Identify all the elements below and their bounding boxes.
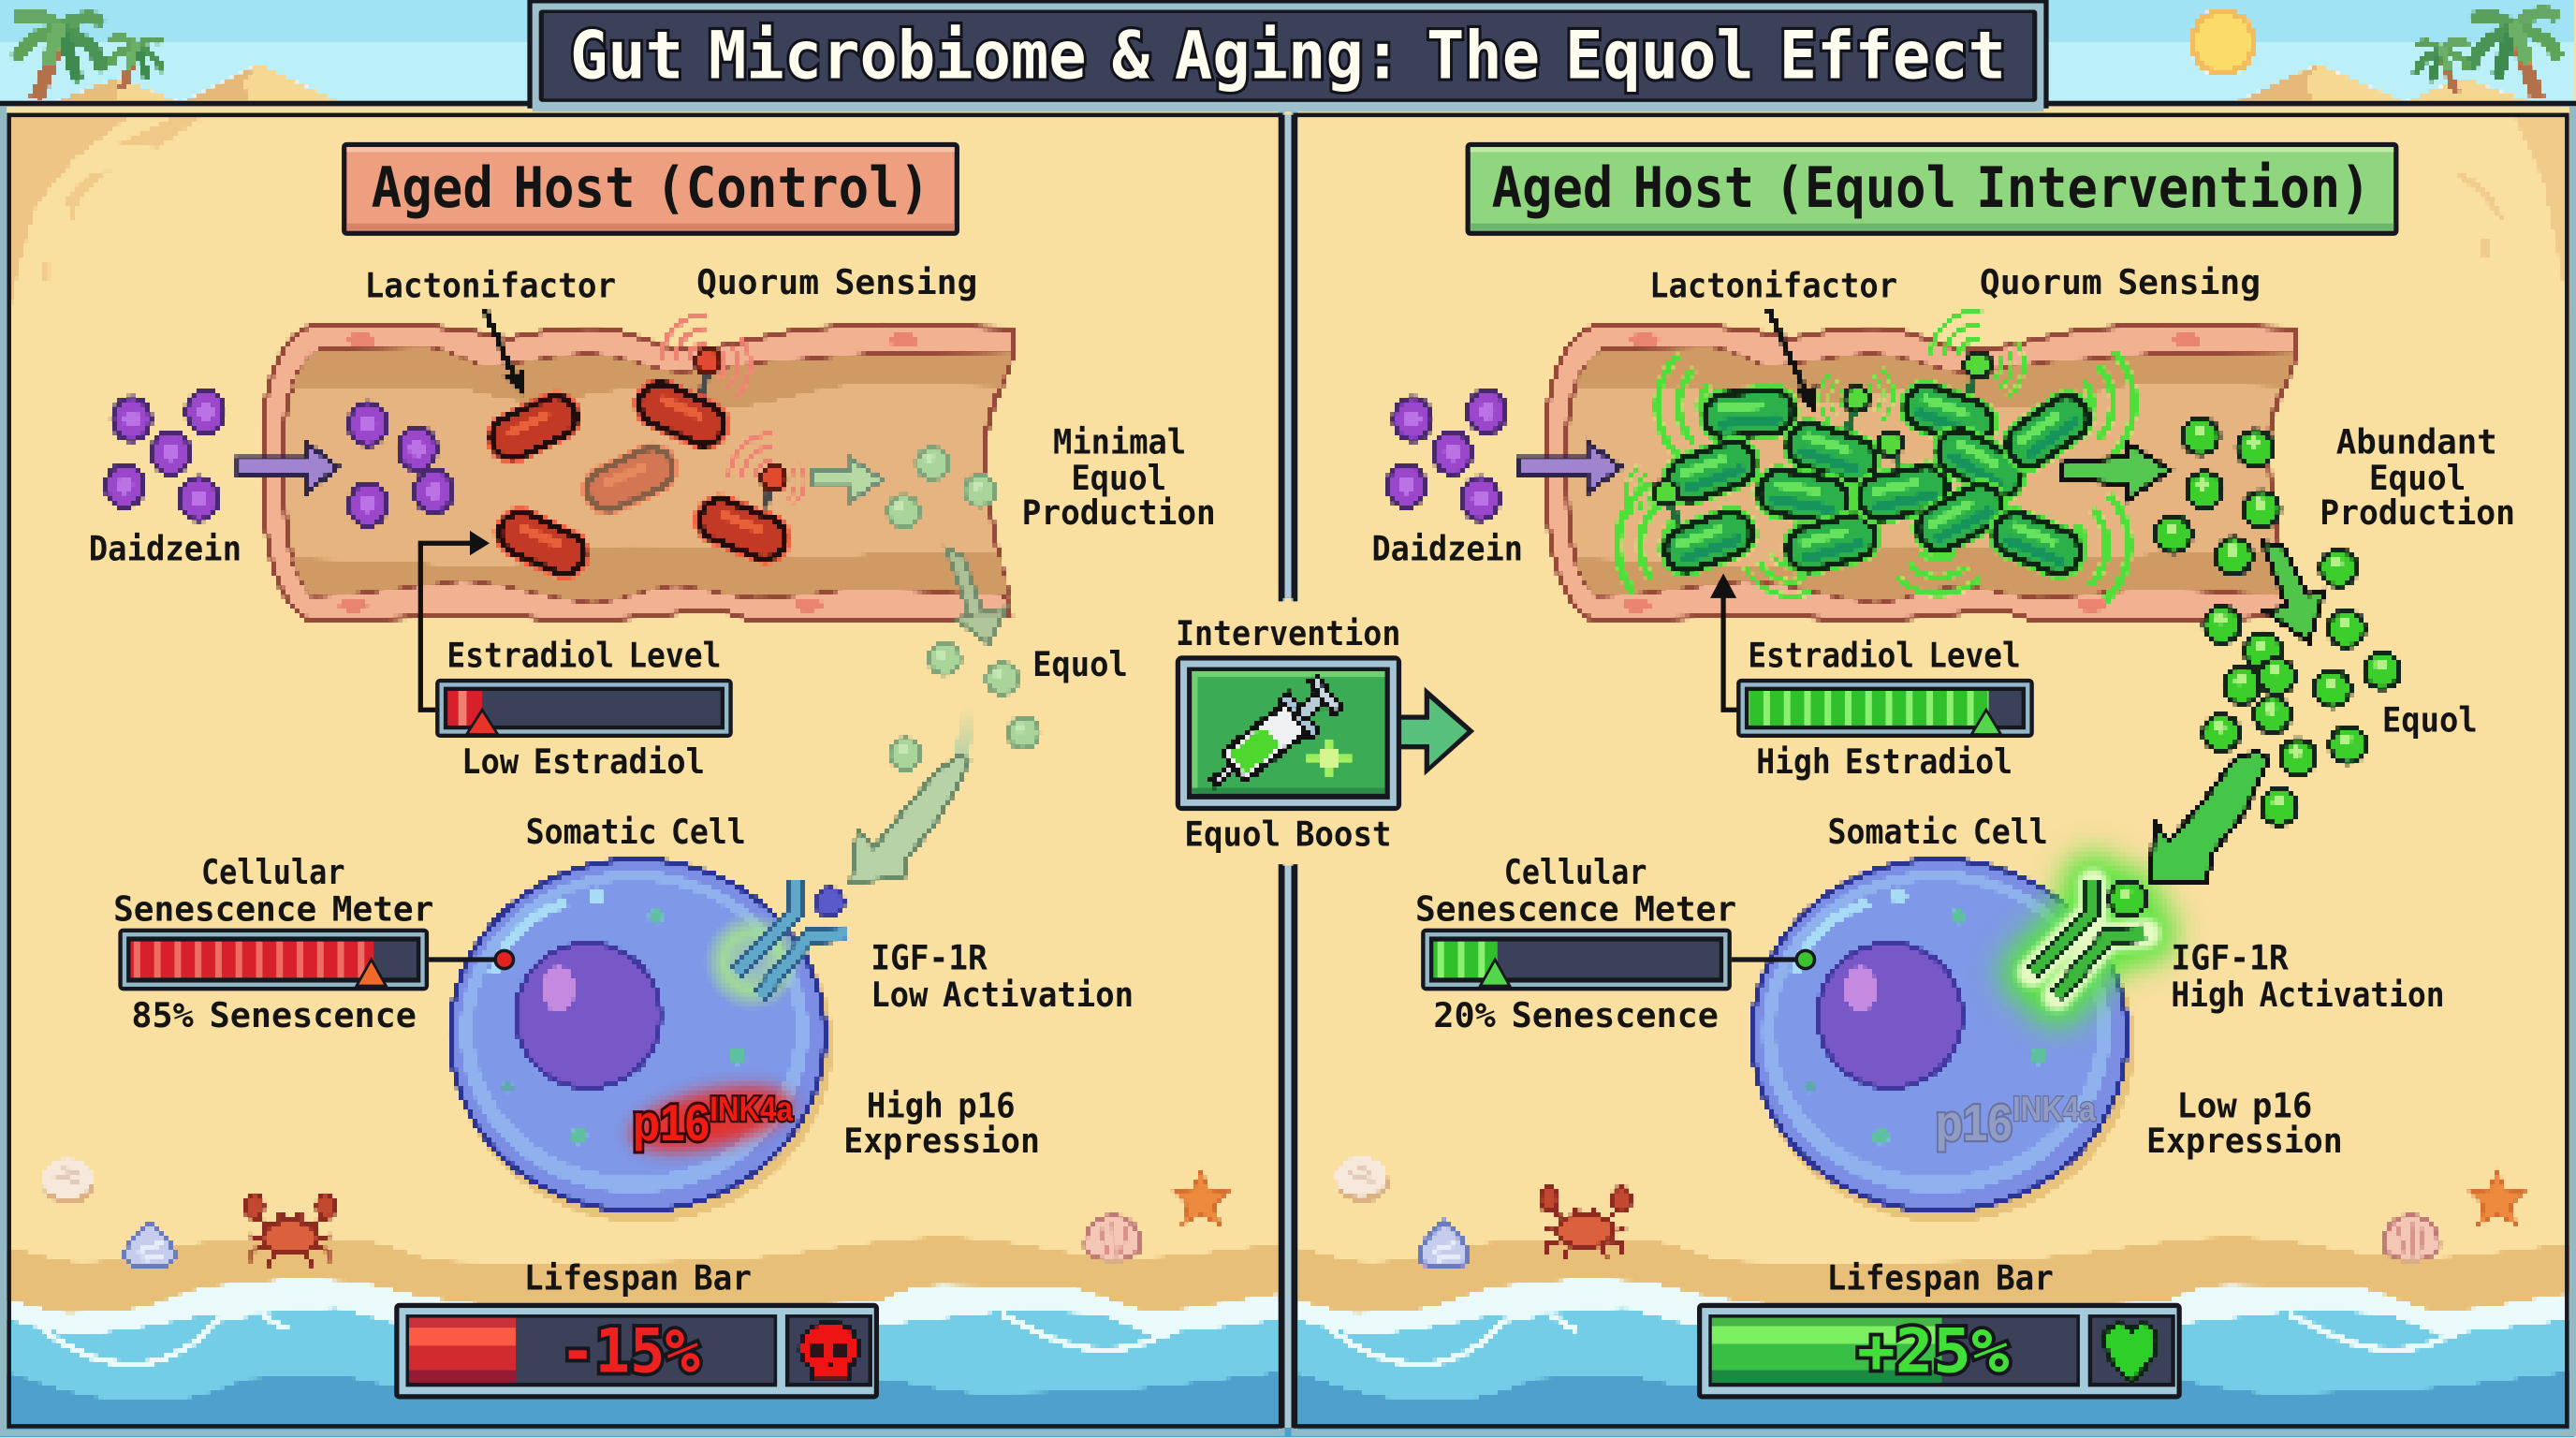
- labels control gut: Daidzein: [89, 528, 242, 568]
- estradiol meter control: Estradiol Level: [446, 636, 721, 676]
- antenna balls control: [695, 349, 786, 491]
- labels control gut: [89, 262, 1216, 684]
- arrow: equol out of gut intervention: [2262, 542, 2324, 642]
- cell labels control: Somatic Cell: [526, 812, 746, 852]
- estradiol meter intervention: Estradiol Level: [1748, 636, 2021, 676]
- icon: starfish: [1175, 1171, 1227, 1225]
- bacteria intervention: [1651, 373, 2105, 587]
- icon layer: [800, 672, 2157, 1382]
- icon: sparkle: [1308, 738, 1351, 777]
- equol particles control: [888, 448, 1039, 770]
- arrow: daidzein in control: [238, 442, 339, 493]
- senescence meter control: Cellular: [201, 852, 345, 892]
- beach and waves right: [1280, 1238, 2576, 1438]
- icon: pink shell right: [2383, 1216, 2438, 1265]
- panel: aged host equol intervention: [1293, 101, 2576, 1432]
- palm tree large right: [2472, 13, 2556, 98]
- icon: blue shell right: [1419, 1222, 1469, 1268]
- daidzein inside gut control: [349, 403, 453, 526]
- p16 marker intervention: [1936, 1090, 2096, 1152]
- senescence meter control: 85% Senescence: [131, 995, 417, 1035]
- labels intervention gut: Quorum Sensing: [1980, 262, 2261, 302]
- labels control gut: Minimal: [1053, 421, 1186, 462]
- palm tree small left: [110, 37, 161, 89]
- lifespan bar intervention: Lifespan Bar: [1827, 1258, 2054, 1299]
- senescence meter intervention: [1415, 852, 1815, 1035]
- heading: aged host control: [342, 142, 959, 236]
- icon: white shell right: [1336, 1157, 1389, 1203]
- palm tree small right: [2417, 41, 2466, 93]
- senescence meter control: Senescence Meter: [113, 889, 433, 930]
- palm tree large left: [18, 15, 102, 100]
- cell labels control: [526, 812, 1134, 1161]
- gut tube intervention: [1546, 324, 2310, 621]
- background: sky: [0, 0, 2576, 110]
- cell labels intervention: [1828, 812, 2445, 1161]
- icon: starfish right: [2471, 1171, 2524, 1225]
- p16 marker control: [633, 1090, 793, 1152]
- labels intervention gut: Daidzein: [1372, 528, 1523, 568]
- cell labels intervention: Expression: [2146, 1121, 2343, 1161]
- estradiol arrow control: [420, 531, 490, 710]
- ligand intervention: [2110, 881, 2145, 917]
- senescence meter intervention: Cellular: [1504, 852, 1647, 892]
- arrow: faint trail above receptor arrow: [953, 707, 976, 759]
- icon: crab right: [1540, 1187, 1631, 1260]
- daidzein molecules intervention: [1387, 390, 1506, 520]
- icon: sun: [2189, 7, 2257, 77]
- arrow: minimal conversion: [813, 459, 882, 501]
- panel: aged host control: [0, 101, 1283, 1432]
- p16 marker control: p16: [633, 1094, 710, 1152]
- estradiol meter intervention: High Estradiol: [1756, 741, 2012, 782]
- gut tube control: [263, 324, 1027, 621]
- cell labels control: Expression: [843, 1121, 1040, 1161]
- senescence meter intervention: Senescence Meter: [1415, 889, 1736, 930]
- beach and waves left: [0, 1238, 1298, 1438]
- ligand control: [815, 888, 843, 916]
- cell control: [450, 859, 833, 1223]
- equol particles intervention: [2155, 418, 2400, 825]
- estradiol meter intervention: [1736, 636, 2034, 782]
- senescence meter intervention: 20% Senescence: [1433, 995, 1719, 1035]
- title banner: [527, 0, 2049, 111]
- p16 glow control: [625, 1075, 798, 1164]
- senescence meter control: [113, 852, 513, 1035]
- labels intervention gut: Production: [2320, 492, 2515, 533]
- arrow: lactonifactor pointer intervention: [1768, 309, 1819, 414]
- center gap with intervention opening: [1277, 601, 1301, 864]
- icon: white shell: [42, 1158, 95, 1204]
- estradiol meter control: [435, 636, 733, 782]
- label: equol boost: Equol Boost: [1184, 814, 1392, 854]
- p16 marker intervention: p16: [1936, 1094, 2012, 1152]
- lifespan bar control: Lifespan Bar: [524, 1258, 752, 1299]
- labels control gut: Quorum Sensing: [696, 262, 977, 302]
- estradiol meter control: Low Estradiol: [461, 741, 705, 782]
- bacteria control: [476, 369, 799, 589]
- antenna intervention: [1666, 365, 1978, 533]
- arrow: faint equol to receptor: [851, 756, 970, 882]
- cell labels intervention: Low p16: [2177, 1085, 2312, 1125]
- arrow: abundant conversion: [2062, 442, 2170, 501]
- lifespan bar intervention: +25%: [1857, 1317, 2009, 1387]
- cell intervention: [1752, 859, 2135, 1223]
- title text: Gut Microbiome & Aging: The Equol Effect: [570, 17, 2006, 94]
- labels control gut: Equol: [1071, 458, 1166, 498]
- intervention box: [1176, 655, 1474, 811]
- quorum waves control: [651, 304, 806, 506]
- icon: pink shell: [1085, 1216, 1141, 1265]
- sand dune shading right: [2456, 115, 2568, 312]
- icon: blue shell: [124, 1222, 174, 1268]
- quorum waves intervention: [1611, 301, 2134, 605]
- estradiol arrow intervention: [1710, 574, 1738, 710]
- arrow: lactonifactor pointer: [485, 309, 526, 396]
- arrow: equol to receptor intervention: [2150, 751, 2269, 882]
- igf-1r receptor intervention: [2032, 879, 2145, 996]
- cell labels control: Low Activation: [871, 975, 1134, 1015]
- divider lower: [1280, 866, 1296, 1428]
- heading: aged host control: Aged Host (Control): [372, 156, 929, 221]
- sand dune shading left: [8, 115, 205, 320]
- icon: sun core: [2196, 14, 2250, 70]
- icon: syringe: [1197, 672, 1344, 802]
- cell labels control: IGF-1R: [871, 938, 988, 978]
- label: intervention: Intervention: [1176, 613, 1400, 653]
- background: distant dunes right: [2236, 64, 2530, 102]
- labels intervention gut: [1372, 262, 2515, 741]
- labels intervention gut: Equol: [2382, 700, 2478, 741]
- icon: crab: [245, 1194, 335, 1267]
- icon: heart: [2104, 1325, 2157, 1382]
- heading: aged host equol intervention: [1466, 142, 2398, 236]
- labels intervention gut: Lactonifactor: [1649, 266, 1897, 306]
- arrow: faint equol out of gut: [946, 549, 1005, 644]
- arrow: daidzein in intervention: [1519, 442, 1621, 493]
- labels control gut: Lactonifactor: [365, 266, 616, 306]
- icon: skull: [800, 1323, 859, 1380]
- divider upper: [1280, 115, 1296, 598]
- labels control gut: Equol: [1032, 644, 1128, 684]
- lifespan bar control: -15%: [560, 1317, 700, 1387]
- igf-1r receptor control: [735, 879, 848, 996]
- p16 marker intervention: INK4a: [2012, 1090, 2096, 1128]
- heading: aged host equol intervention: Aged Host (Equol Intervention): [1492, 156, 2371, 221]
- p16 marker control: INK4a: [710, 1090, 793, 1128]
- antenna balls intervention: [1654, 352, 1991, 506]
- background: distant dunes left: [56, 64, 340, 102]
- cell labels intervention: High Activation: [2171, 975, 2445, 1015]
- cell labels control: High p16: [867, 1085, 1016, 1125]
- cell labels intervention: Somatic Cell: [1828, 812, 2048, 852]
- receptor glow outer intervention: [2032, 884, 2145, 996]
- lifespan bar intervention: [1697, 1258, 2182, 1399]
- labels control gut: Production: [1022, 492, 1216, 533]
- labels intervention gut: Equol: [2369, 458, 2466, 498]
- daidzein molecules control: [106, 390, 225, 520]
- antenna control: [701, 365, 774, 507]
- cell labels intervention: IGF-1R: [2171, 938, 2290, 978]
- receptor glow control: [703, 912, 801, 1010]
- labels intervention gut: Abundant: [2336, 421, 2497, 462]
- lifespan bar control: [394, 1258, 879, 1399]
- receptor glow inner intervention: [2032, 884, 2145, 996]
